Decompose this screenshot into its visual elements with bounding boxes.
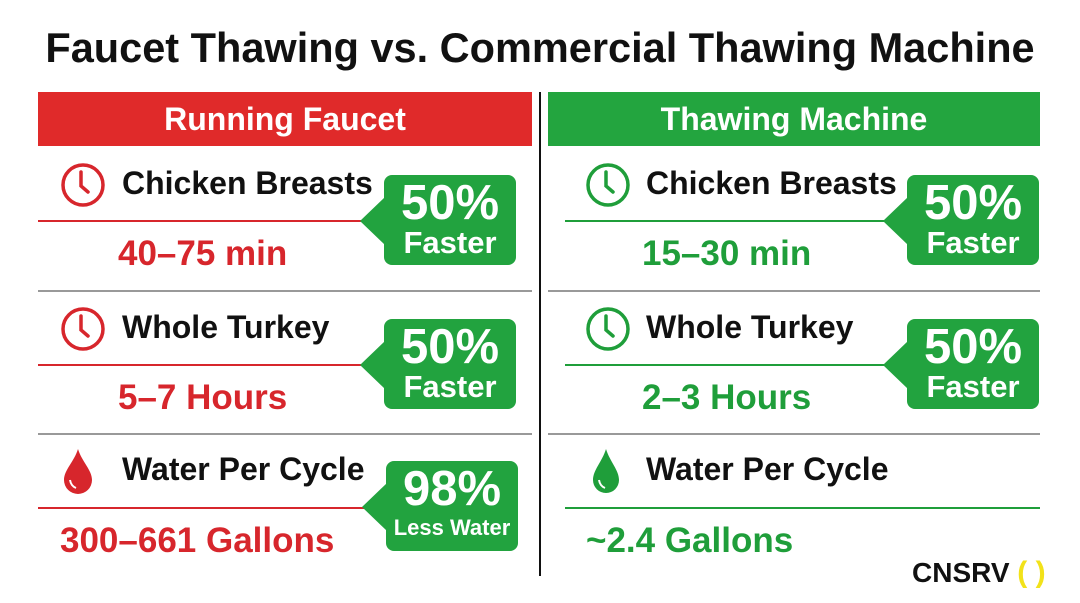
title: Faucet Thawing vs. Commercial Thawing Machine <box>45 24 1035 71</box>
badge: 50% faster: Faster <box>926 369 1020 404</box>
icon: clock <box>61 163 105 207</box>
icon: clock <box>61 307 105 351</box>
icon: water drop <box>64 449 92 494</box>
badge: 50% faster <box>907 175 1039 265</box>
header: thawing machine <box>548 92 1040 146</box>
badge: 98% less water: 98% <box>403 462 501 516</box>
badge: 50% faster: 50% <box>924 176 1022 230</box>
icon: clock <box>586 307 630 351</box>
badge: 50% faster <box>384 319 516 409</box>
header: thawing machine: Thawing Machine <box>661 101 927 137</box>
badge: 98% less water: Less Water <box>394 515 510 540</box>
logo: CNSRV: CNSRV ( ) <box>912 556 1046 589</box>
value: 300–661 gallons: 300–661 Gallons <box>60 521 334 560</box>
badge: 50% faster: Faster <box>403 225 497 260</box>
header: running faucet <box>38 92 532 146</box>
badge: 50% faster <box>907 319 1039 409</box>
panel: running faucet <box>38 163 518 560</box>
badge: 98% less water <box>386 461 518 551</box>
heading: water per cycle: Water Per Cycle <box>122 451 364 487</box>
value: 5–7 hours: 5–7 Hours <box>118 378 287 417</box>
badge: 50% faster: 50% <box>924 320 1022 374</box>
badge: 50% faster: 50% <box>401 176 499 230</box>
heading: water per cycle: Water Per Cycle <box>646 451 888 487</box>
badge: 50% faster: 50% <box>401 320 499 374</box>
heading: whole turkey: Whole Turkey <box>646 309 853 345</box>
header: running faucet: Running Faucet <box>164 101 406 137</box>
badge: 50% faster <box>384 175 516 265</box>
value: 40–75 min: 40–75 min <box>118 234 287 273</box>
value: ~2.4 gallons: ~2.4 Gallons <box>586 521 793 560</box>
badge: 50% faster: Faster <box>926 225 1020 260</box>
heading: whole turkey: Whole Turkey <box>122 309 329 345</box>
panel: thawing machine <box>565 163 1040 560</box>
icon: water drop <box>593 449 619 493</box>
value: 2–3 hours: 2–3 Hours <box>642 378 811 417</box>
icon: clock <box>586 163 630 207</box>
heading: chicken breasts: Chicken Breasts <box>646 165 897 201</box>
value: 15–30 min: 15–30 min <box>642 234 811 273</box>
badge: 50% faster: Faster <box>403 369 497 404</box>
heading: chicken breasts: Chicken Breasts <box>122 165 373 201</box>
